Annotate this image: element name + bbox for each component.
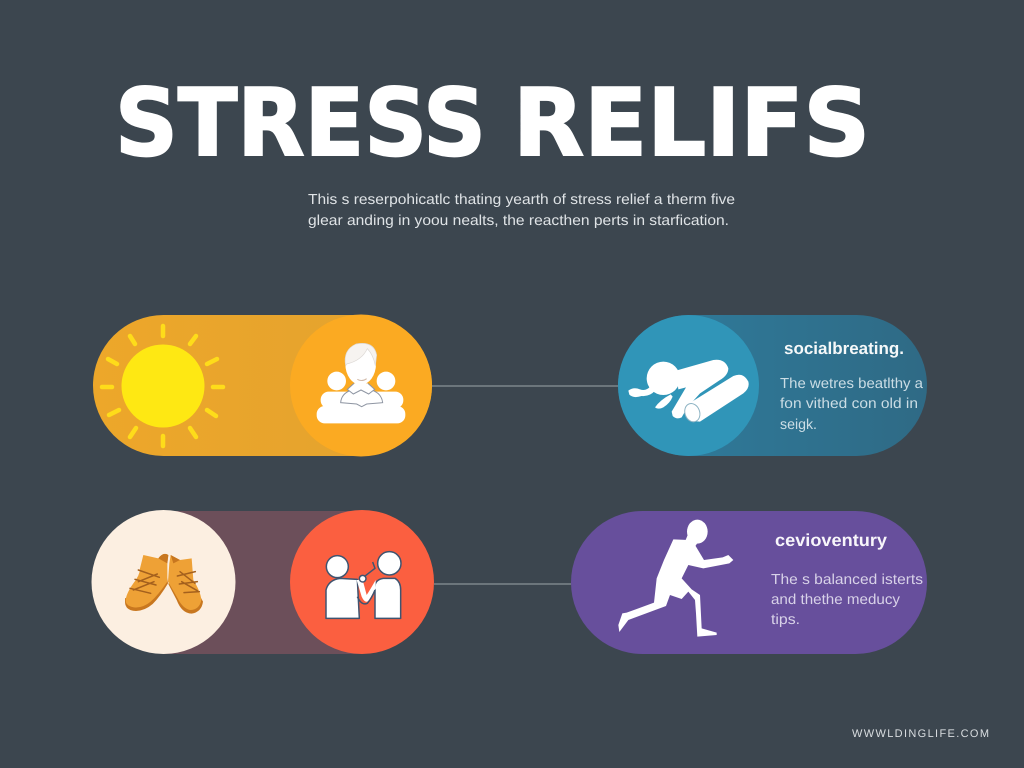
title [115,69,870,177]
panel heading: socialbreating. [784,339,904,358]
panel body text: fon vithed con old in [780,396,918,412]
panel body text [771,572,923,628]
panel body text: The s balanced isterts [771,572,923,588]
icon: group of people [317,343,405,423]
icon: sun [102,326,223,446]
panel body text [780,376,924,433]
panel heading: cevioventury [775,530,887,550]
panel body text: tips. [771,612,800,628]
title: STRESS [115,69,486,177]
connector: top [432,385,618,387]
panel: socialbreating [618,315,927,456]
circle: roller background [618,315,759,456]
panel body text: The wetres beatlthy a [780,376,924,392]
title: RELIFS [513,69,870,177]
panel: shoes and friends [92,510,434,654]
connector: bottom [434,583,571,585]
icon: person on foam roller [628,360,749,424]
intro text [308,192,735,229]
circle: friends background [290,510,434,654]
panel: cevioventury [571,511,927,654]
circle: group background [290,314,432,456]
circle: shoes background [92,510,236,654]
icon: two friends [326,552,401,618]
intro text: This s reserpohicatlc thating yearth of stress relief a therm five [308,192,735,208]
intro text: glear anding in yoou nealts, the reacthen perts in starfication. [308,213,729,229]
icon: shoes [125,554,203,614]
panel: sun and group [93,314,432,456]
icon: runner [618,520,733,637]
panel body text: seigk. [780,417,817,433]
footer url: WWWLDINGLIFE.COM [852,728,989,740]
panel body text: and thethe meducy [771,592,901,608]
